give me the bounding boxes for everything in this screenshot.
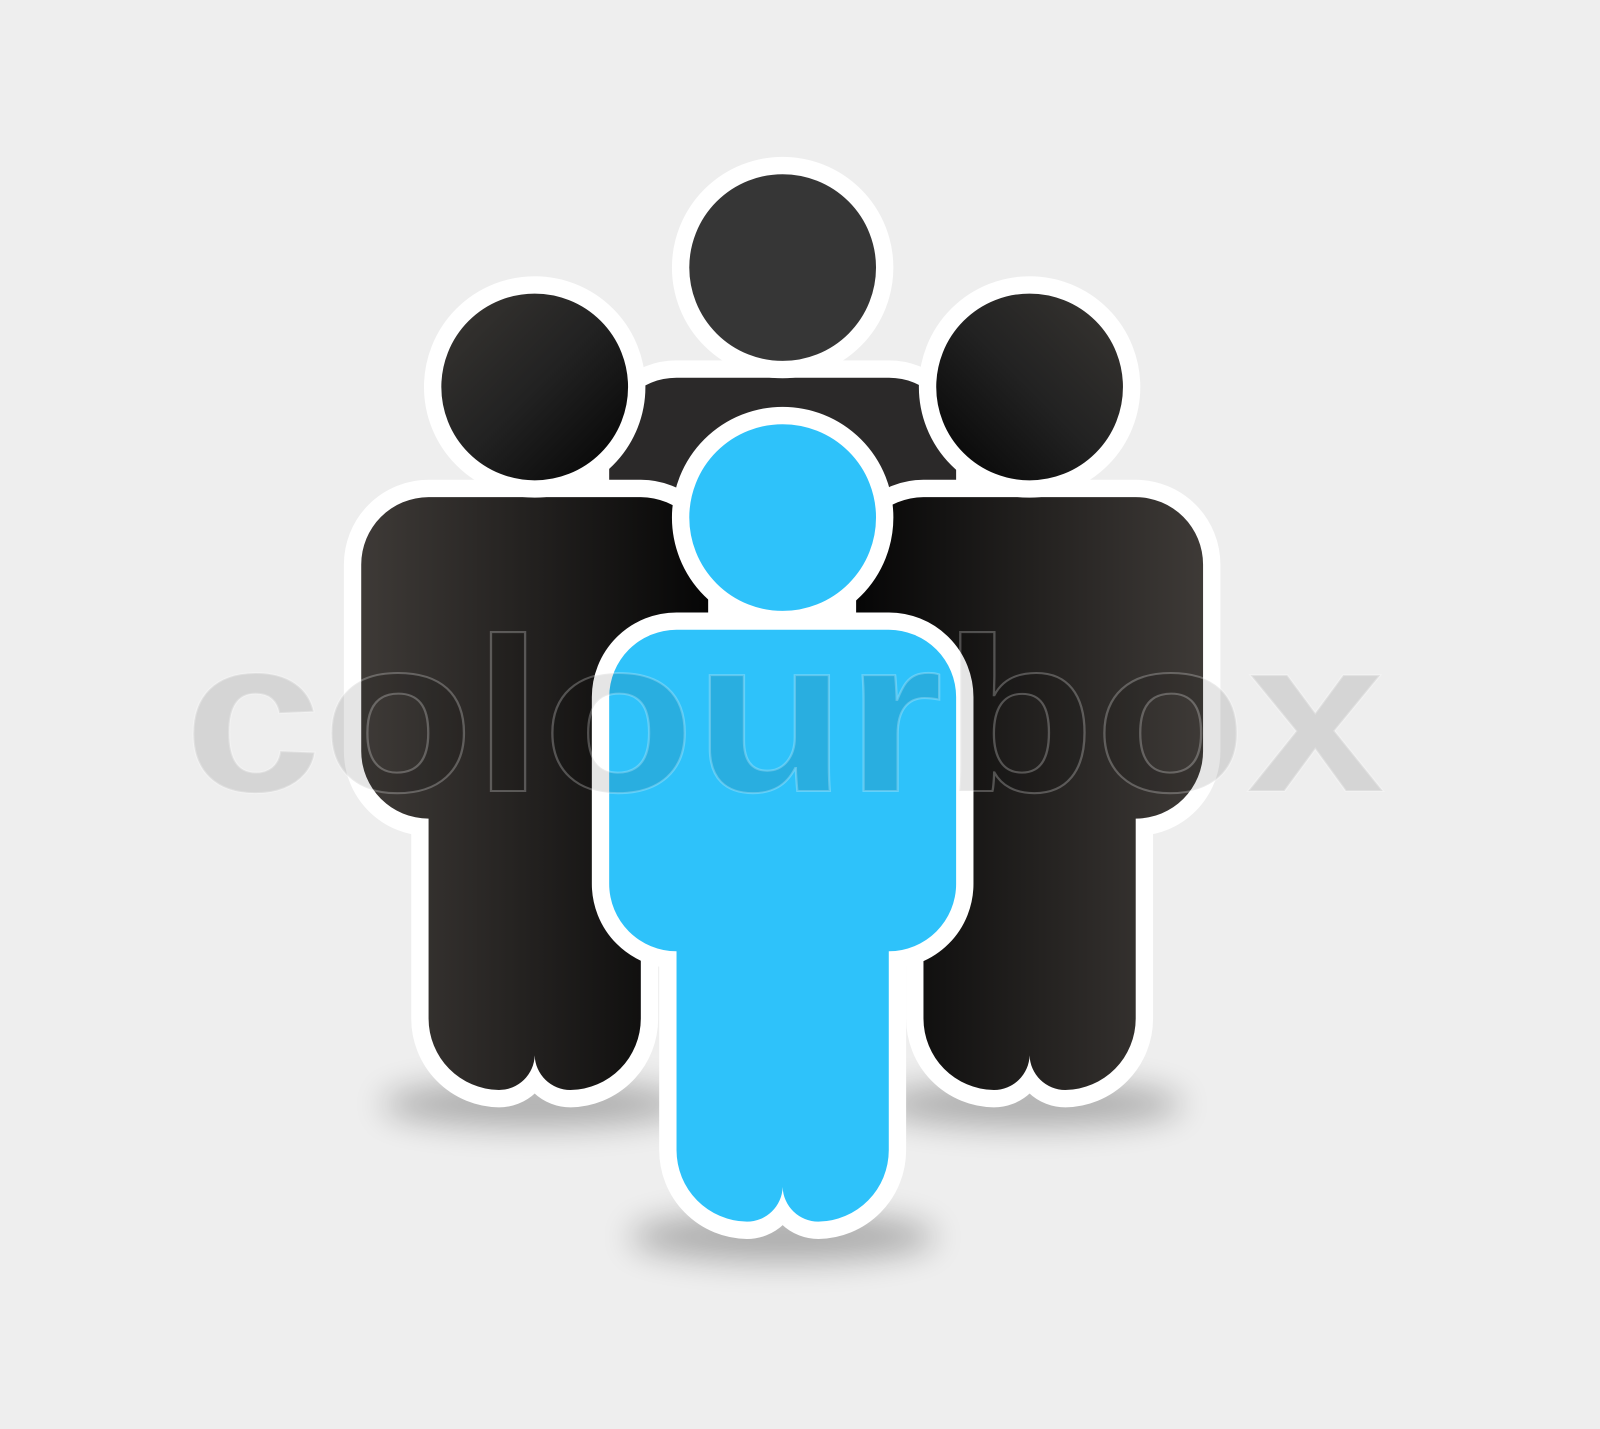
figure: left person (361, 285, 708, 1090)
figure: back center person (609, 166, 956, 970)
watermark text: colourbox (184, 593, 1385, 838)
shadows (382, 1082, 1183, 1261)
figure: right person (856, 285, 1203, 1090)
figure: front blue person (609, 416, 956, 1222)
